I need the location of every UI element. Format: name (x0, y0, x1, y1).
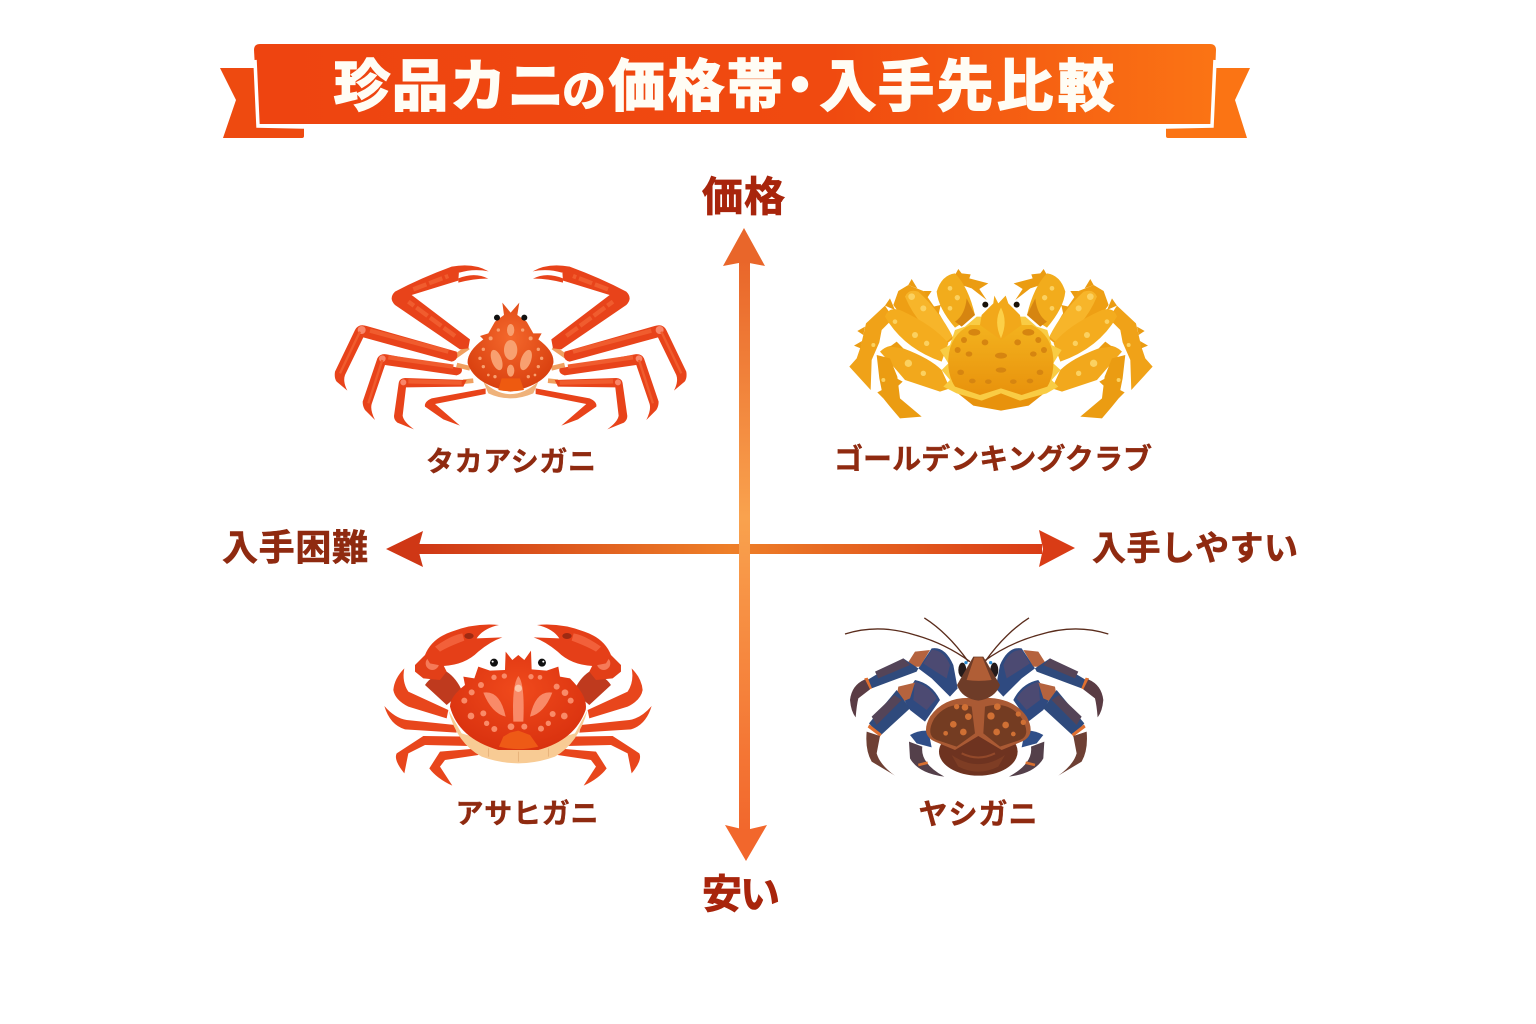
axis label: cheap: 安い (702, 873, 780, 917)
label: coconut crab: ヤシガニ (918, 798, 1038, 831)
title text: 価格帯・入手先比較 (609, 55, 1114, 118)
horizontal axis arrow: availability (386, 530, 1075, 567)
label: golden king crab: ゴールデンキングクラブ (834, 442, 1152, 476)
label: asahigani: アサヒガニ (456, 798, 598, 829)
crab: asahigani illustration (384, 625, 652, 786)
title text: の (562, 67, 606, 116)
vertical axis arrow: price (723, 228, 767, 861)
ribbon left tail (220, 68, 304, 138)
title banner (220, 44, 1250, 138)
crab: coconut crab illustration (845, 618, 1108, 777)
axis label: easy to obtain: 入手しやすい (1092, 530, 1298, 568)
ribbon body (254, 44, 1216, 124)
axis label: price high: 価格 (702, 174, 785, 220)
crab: golden king crab illustration (849, 269, 1153, 418)
label: takaashigani: タカアシガニ (426, 446, 596, 477)
axis label: hard to obtain: 入手困難 (222, 527, 368, 568)
title text: 珍品カニ (334, 55, 564, 118)
ribbon fold outline (255, 60, 1215, 127)
ribbon right tail (1166, 68, 1250, 138)
crab: takaashigani illustration (335, 265, 687, 429)
